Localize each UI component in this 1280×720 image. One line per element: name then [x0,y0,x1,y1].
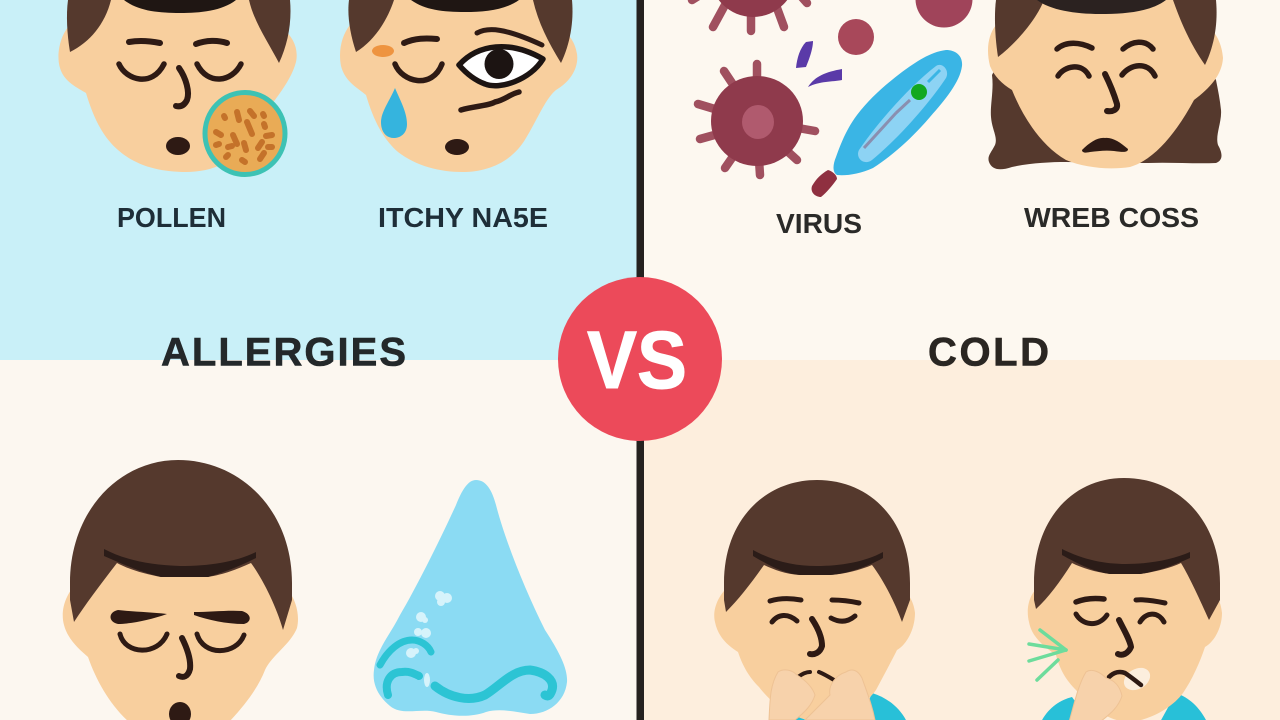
icon: wide open eye [459,47,543,86]
panel: allergy triggers (top left) [0,0,637,360]
panel: cold symptoms (bottom right) [644,360,1280,720]
icon: purple fragment one [796,41,813,68]
icon: sleepy face [63,460,298,720]
heading: cold: COLD [928,330,1049,374]
label: pollen: POLLEN [117,202,226,233]
center divider [636,0,644,720]
icon: right fist [805,670,875,720]
icon: virus particle small [838,19,874,55]
icon: sad face with long hair [988,0,1223,169]
icon: person sneezing [1028,478,1222,720]
icon: white breath blur [1120,663,1154,695]
icon: pollen face [58,0,297,174]
icon: virus particle large [916,0,972,28]
vs badge [558,277,722,441]
label: itchy nose: ITCHY NA5E [378,202,548,233]
icon: runny nose [374,480,567,716]
icon: person coughing into both hands [714,480,915,720]
icon: green sneeze burst [1029,630,1066,680]
icon: virus top [692,0,807,31]
icon: fist at mouth [1069,670,1122,720]
label: wreb coss: WREB COSS [1024,202,1199,233]
panel: allergy symptoms (bottom left) [0,360,637,720]
icon: itchy eye face [340,0,577,172]
icon: left fist [769,670,815,720]
label: virus: VIRUS [776,208,862,239]
icon: virus main [698,64,815,175]
panel: cold causes (top right) [644,0,1280,360]
heading: allergies: ALLERGIES [161,330,406,374]
vs badge: VS [587,315,687,406]
icon: purple fragment two [808,69,842,87]
icon: pollen grain [205,92,285,174]
icon: thermometer [812,50,962,197]
